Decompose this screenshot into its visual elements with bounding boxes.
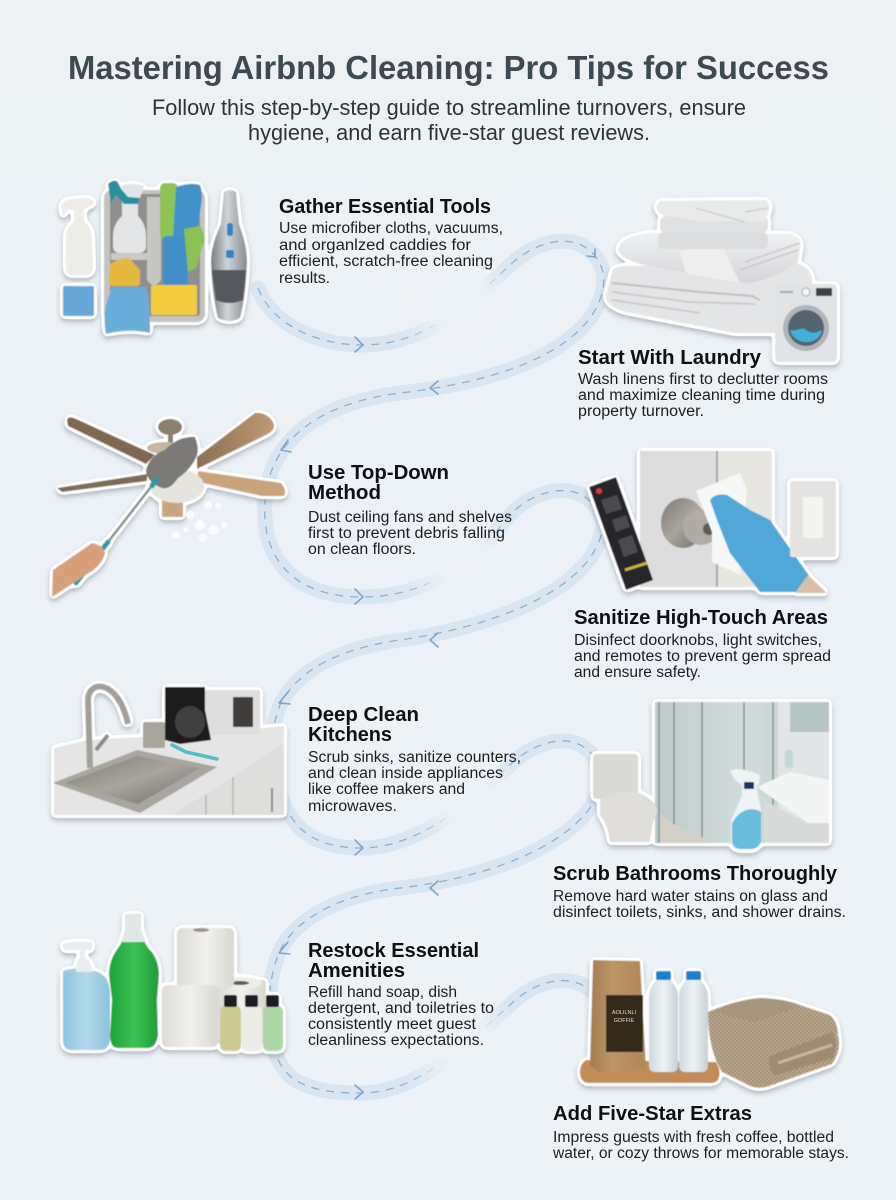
description: Refill hand soap, dish — [308, 984, 457, 1001]
description — [308, 509, 512, 558]
description: water, or cozy throws for memorable stays. — [552, 1145, 849, 1162]
toilet — [593, 754, 638, 799]
description: like coffee makers and — [308, 781, 465, 798]
icon: soap, dish detergent, toilet paper and toiletries — [62, 914, 283, 1051]
icon: cleaning caddy, spray bottle, cloth and hand vacuum — [61, 181, 247, 334]
heading: Add Five-Star Extras — [553, 1103, 752, 1125]
heading: Kitchens — [308, 724, 392, 746]
icon: ceiling fan being dusted — [52, 413, 285, 597]
arm and hand — [52, 543, 105, 597]
caddy tray — [104, 190, 205, 322]
description — [308, 749, 521, 815]
hand soap pump — [63, 968, 110, 1050]
description — [574, 632, 831, 681]
wooden tray — [580, 1060, 720, 1083]
description: results. — [279, 270, 330, 287]
yellow sponges — [109, 258, 140, 286]
description — [578, 371, 828, 420]
description: Dust ceiling fans and shelves — [308, 509, 512, 526]
spray bottle — [730, 769, 761, 850]
heading: Scrub Bathrooms Thoroughly — [553, 863, 838, 885]
heading: Use Top-Down — [308, 462, 449, 484]
step 1: Gather Essential Tools — [61, 181, 503, 334]
step 2: Start With Laundry — [578, 200, 837, 420]
step 5: Deep Clean Kitchens — [53, 687, 521, 815]
bottom folded sheets — [606, 263, 812, 333]
folded throw blanket — [708, 998, 839, 1088]
step 7: Restock Essential Amenities — [62, 914, 494, 1051]
remote control — [589, 477, 653, 590]
description: Wash linens first to declutter rooms — [578, 371, 828, 388]
mirror — [790, 702, 829, 732]
description — [308, 984, 494, 1049]
middle towel — [618, 233, 801, 283]
coffee label text: GOFFIE — [614, 1018, 635, 1024]
coffee maker — [165, 687, 211, 744]
subtitle — [152, 95, 746, 145]
fan blades — [67, 417, 155, 464]
description: Disinfect doorknobs, light switches, — [574, 632, 822, 649]
description: Scrub sinks, sanitize counters, — [308, 749, 521, 766]
icon: bathroom with toilet, shower and spray bottle — [593, 702, 829, 850]
description: on clean floors. — [308, 541, 416, 558]
description: first to prevent debris falling — [308, 525, 505, 542]
shower floor — [660, 815, 730, 843]
cabinets — [172, 743, 284, 815]
step 4: Sanitize High-Touch Areas — [574, 451, 836, 681]
description: Use microfiber cloths, vacuums, — [279, 220, 503, 237]
door photo — [640, 451, 772, 587]
description: and organlzed caddies for — [279, 237, 471, 254]
description — [279, 220, 503, 287]
icon: towel stack and washing machine — [606, 200, 837, 362]
green detergent bottle — [109, 930, 159, 1048]
heading — [308, 462, 449, 504]
microwave — [205, 690, 260, 735]
heading: Sanitize High-Touch Areas — [574, 607, 828, 629]
description: and clean inside appliances — [308, 765, 503, 782]
heading: Start With Laundry — [578, 347, 762, 369]
feather duster — [146, 437, 198, 488]
utensil holder — [143, 722, 165, 748]
ceiling mount and glass bowl — [158, 419, 182, 435]
gloved hand — [710, 495, 810, 592]
description: Impress guests with fresh coffee, bottled — [553, 1129, 834, 1146]
extension wand — [108, 483, 154, 542]
description: disinfect toilets, sinks, and shower drains. — [553, 904, 846, 921]
coffee bag — [590, 960, 646, 1073]
green and blue cloths — [160, 183, 178, 239]
toilet paper rolls — [217, 980, 266, 1044]
step 6: Scrub Bathrooms Thoroughly — [553, 702, 846, 921]
description: consistently meet guest — [308, 1016, 477, 1033]
door knob — [661, 498, 705, 548]
description: property turnover. — [578, 403, 704, 420]
icon: door knob, gloved hand, remote and light switch — [589, 451, 836, 593]
heading — [308, 940, 479, 982]
icon: coffee, bottled water and throw blanket on tray — [580, 960, 839, 1088]
description: and ensure safety. — [574, 664, 701, 681]
faucet — [88, 687, 128, 768]
counter — [54, 726, 284, 815]
description: microwaves. — [308, 798, 397, 815]
teal dish brush — [172, 745, 217, 759]
water bottles — [649, 972, 678, 1072]
description: efficient, scratch-free cleaning — [279, 253, 493, 270]
spray bottle — [61, 198, 94, 275]
coffee label text — [612, 1010, 637, 1024]
heading: Amenities — [308, 960, 405, 982]
step 3: Use Top-Down Method — [52, 413, 512, 597]
description: detergent, and toiletries to — [308, 1000, 494, 1017]
sink — [53, 750, 217, 813]
subtitle: hygiene, and earn five-star guest reviews. — [248, 120, 650, 145]
description: and maximize cleaning time during — [578, 387, 825, 404]
hand vacuum — [211, 190, 247, 321]
icon: kitchen counter with sink and appliances — [53, 687, 284, 815]
description — [553, 888, 846, 921]
heading — [308, 704, 419, 746]
description: cleanliness expectations. — [308, 1032, 484, 1049]
wipe — [696, 473, 747, 575]
title: Mastering Airbnb Cleaning: Pro Tips for Success — [68, 49, 829, 86]
heading: Method — [308, 482, 381, 504]
subtitle: Follow this step-by-step guide to streamline turnovers, ensure — [152, 95, 746, 120]
vanity — [757, 772, 829, 823]
description — [552, 1129, 849, 1162]
description: Remove hard water stains on glass and — [553, 888, 828, 905]
blue cloth square — [63, 286, 94, 316]
step 8: Add Five-Star Extras — [552, 960, 849, 1162]
winding ribbon path connecting all steps — [258, 241, 604, 1093]
path arrows — [279, 249, 595, 1099]
dust particles — [172, 501, 227, 542]
heading: Gather Essential Tools — [279, 196, 491, 218]
bathroom photo — [655, 702, 829, 843]
heading: Restock Essential — [308, 940, 479, 962]
top towels — [658, 232, 768, 249]
description: and remotes to prevent germ spread — [574, 648, 831, 665]
travel toiletries — [220, 1006, 241, 1051]
heading: Deep Clean — [308, 704, 419, 726]
light switch — [790, 481, 836, 557]
inner spray bottle — [113, 184, 146, 253]
washing machine — [775, 284, 837, 362]
coffee label text: AOLILNLI — [612, 1010, 637, 1016]
folded blue cloth — [104, 287, 150, 334]
